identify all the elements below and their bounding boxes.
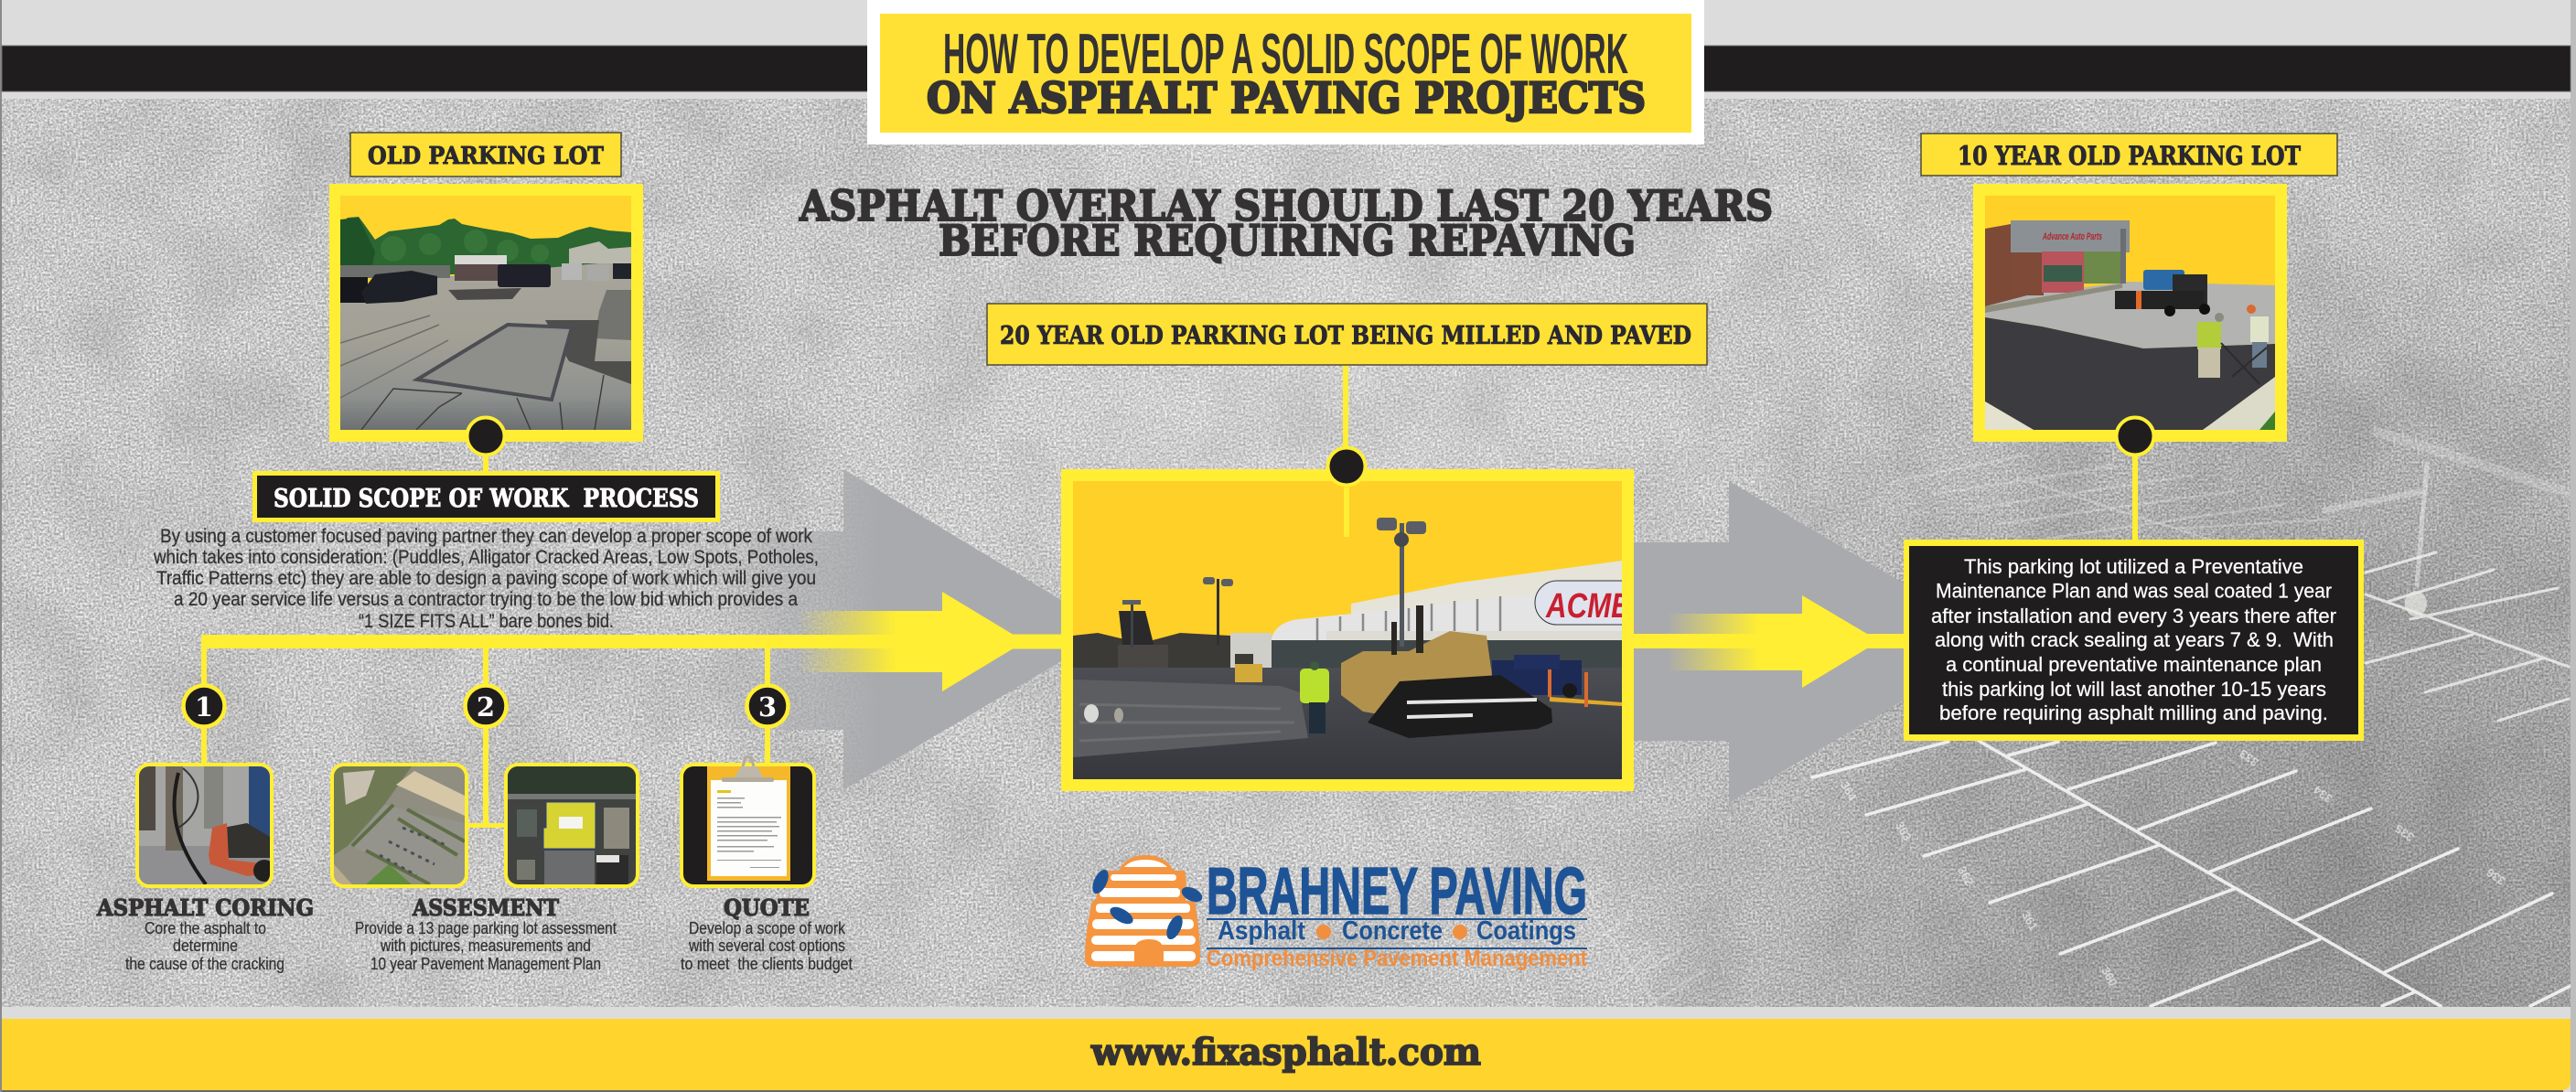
photo: aerial parking lot — [330, 763, 468, 888]
dot: old parking lot connector — [467, 417, 505, 455]
step description: asphalt coring: determine — [173, 937, 238, 955]
callout: preventative maintenance: a continual preventative maintenance plan — [1946, 653, 2322, 676]
photo: seal coating — [1973, 184, 2287, 442]
step 1 number badge — [183, 686, 225, 726]
text block: process description: By using a customer focused paving partner they can develop a proper scope of work — [160, 526, 812, 547]
step description: quote: to meet the clients budget — [681, 955, 853, 973]
parking stall numbers: 334 — [2311, 783, 2335, 806]
arrow: large gray arrow left — [695, 469, 1066, 790]
label: old parking lot — [350, 133, 621, 177]
label: 20 year old parking lot — [987, 304, 1707, 365]
step 2 number badge — [465, 686, 507, 726]
step description: assesment: 10 year Pavement Management Plan — [370, 955, 601, 973]
heading: asphalt overlay — [799, 181, 1773, 265]
panel: solid scope of work process heading: SOLID SCOPE OF WORK PROCESS — [274, 485, 699, 513]
callout: preventative maintenance: before requiring asphalt milling and paving. — [1939, 701, 2328, 724]
label: 10 year old parking lot — [1921, 134, 2337, 176]
process connector lines — [201, 365, 2138, 828]
top black bar — [2, 46, 2571, 91]
light pole base — [2405, 591, 2427, 616]
callout: preventative maintenance: along with crack sealing at years 7 & 9. With — [1935, 628, 2334, 651]
parking stall numbers: 363 — [1893, 819, 1915, 843]
title line 1: HOW TO DEVELOP A SOLID SCOPE OF WORK — [943, 23, 1628, 86]
photo: milling and paving — [1061, 469, 1649, 791]
logo: brahney paving: Coatings — [1476, 916, 1576, 946]
logo: brahney paving: Concrete — [1342, 916, 1443, 946]
step description: asphalt coring: the cause of the cracking — [125, 955, 284, 973]
step description: assesment: with pictures, measurements and — [380, 937, 591, 955]
dot: right connector — [2117, 417, 2153, 455]
step title: assesment: ASSESMENT — [412, 894, 559, 921]
panel: solid scope of work process heading — [254, 474, 717, 519]
step 1 number badge: 1 — [195, 691, 213, 723]
text block: process description — [153, 526, 819, 632]
text block: process description: a 20 year service life versus a contractor trying to be the low bid which provides a — [174, 589, 798, 610]
title line 2: ON ASPHALT PAVING PROJECTS — [927, 73, 1646, 123]
title banner — [867, 0, 1704, 145]
logo: brahney paving: Comprehensive Pavement Management — [1207, 946, 1588, 971]
callout: preventative maintenance: Maintenance Plan and was seal coated 1 year — [1936, 580, 2332, 602]
step 2 number badge: 2 — [477, 691, 495, 723]
logo: brahney paving: Asphalt — [1218, 916, 1305, 946]
label: 20 year old parking lot: 20 YEAR OLD PARKING LOT BEING MILLED AND PAVED — [1000, 322, 1691, 350]
step description: quote: with several cost options — [688, 937, 845, 955]
footer band — [2, 1019, 2571, 1092]
parking stall numbers — [1838, 746, 2508, 989]
arrow: large gray arrow right — [1634, 481, 1907, 803]
photo: quote clipboard — [680, 757, 816, 888]
step description: assesment: Provide a 13 page parking lot assessment — [355, 919, 617, 937]
step description: assesment — [355, 919, 617, 973]
photo: seal coating: Advance Auto Parts — [2042, 231, 2102, 242]
parking stall numbers: 364 — [1838, 779, 1860, 804]
step 3 number badge — [746, 686, 789, 726]
connector stub inside center photo — [1344, 487, 1349, 537]
label: old parking lot: OLD PARKING LOT — [368, 143, 605, 170]
step description: quote: Develop a scope of work — [689, 919, 846, 937]
photo: asphalt coring — [135, 763, 275, 888]
photo: old parking lot — [329, 184, 643, 442]
parking stall numbers: 361 — [2019, 909, 2041, 933]
parking stall numbers: 336 — [2484, 865, 2508, 888]
text block: process description: “1 SIZE FITS ALL” bare bones bid. — [359, 611, 614, 632]
text block: process description: Traffic Patterns etc) they are able to design a paving scope of work which will give you — [156, 568, 816, 589]
step description: asphalt coring: Core the asphalt to — [145, 919, 266, 937]
logo: brahney paving — [1085, 855, 1588, 971]
parking stall numbers: 360 — [2098, 965, 2120, 989]
parking stall numbers: 362 — [1955, 864, 1977, 888]
step title: asphalt coring: ASPHALT CORING — [96, 894, 314, 921]
parking stall numbers: 333 — [2237, 746, 2261, 769]
footer url: www.fixasphalt.com — [1090, 1031, 1481, 1074]
step description: asphalt coring — [125, 919, 284, 973]
dot: center connector — [1328, 448, 1365, 485]
parking lot line drawing — [1541, 432, 2572, 1006]
heading: asphalt overlay: ASPHALT OVERLAY SHOULD LAST 20 YEARS — [799, 181, 1773, 230]
photo: milling and paving: ACME — [1545, 587, 1631, 626]
label: 10 year old parking lot: 10 YEAR OLD PARKING LOT — [1958, 141, 2301, 171]
callout: preventative maintenance — [1904, 540, 2364, 741]
heading: asphalt overlay: BEFORE REQUIRING REPAVING — [939, 216, 1636, 265]
step description: quote — [681, 919, 853, 973]
arrow: yellow arrow left — [799, 592, 1066, 691]
logo: company name: BRAHNEY PAVING — [1207, 855, 1587, 928]
logo: beehive icon — [1085, 855, 1205, 967]
callout: preventative maintenance: This parking lot utilized a Preventative — [1964, 555, 2303, 578]
text block: process description: which takes into consideration: (Puddles, Alligator Cracked Areas, Low Spots, Potholes, — [153, 547, 819, 568]
callout: preventative maintenance: this parking lot will last another 10-15 years — [1942, 678, 2326, 701]
photo: aerial assessment map — [504, 763, 639, 888]
arrow: yellow arrow right — [1628, 595, 1907, 688]
step 3 number badge: 3 — [758, 691, 777, 723]
callout: preventative maintenance: after installation and every 3 years there after — [1931, 605, 2336, 627]
step title: quote: QUOTE — [724, 894, 810, 921]
parking stall numbers: 335 — [2392, 821, 2417, 844]
